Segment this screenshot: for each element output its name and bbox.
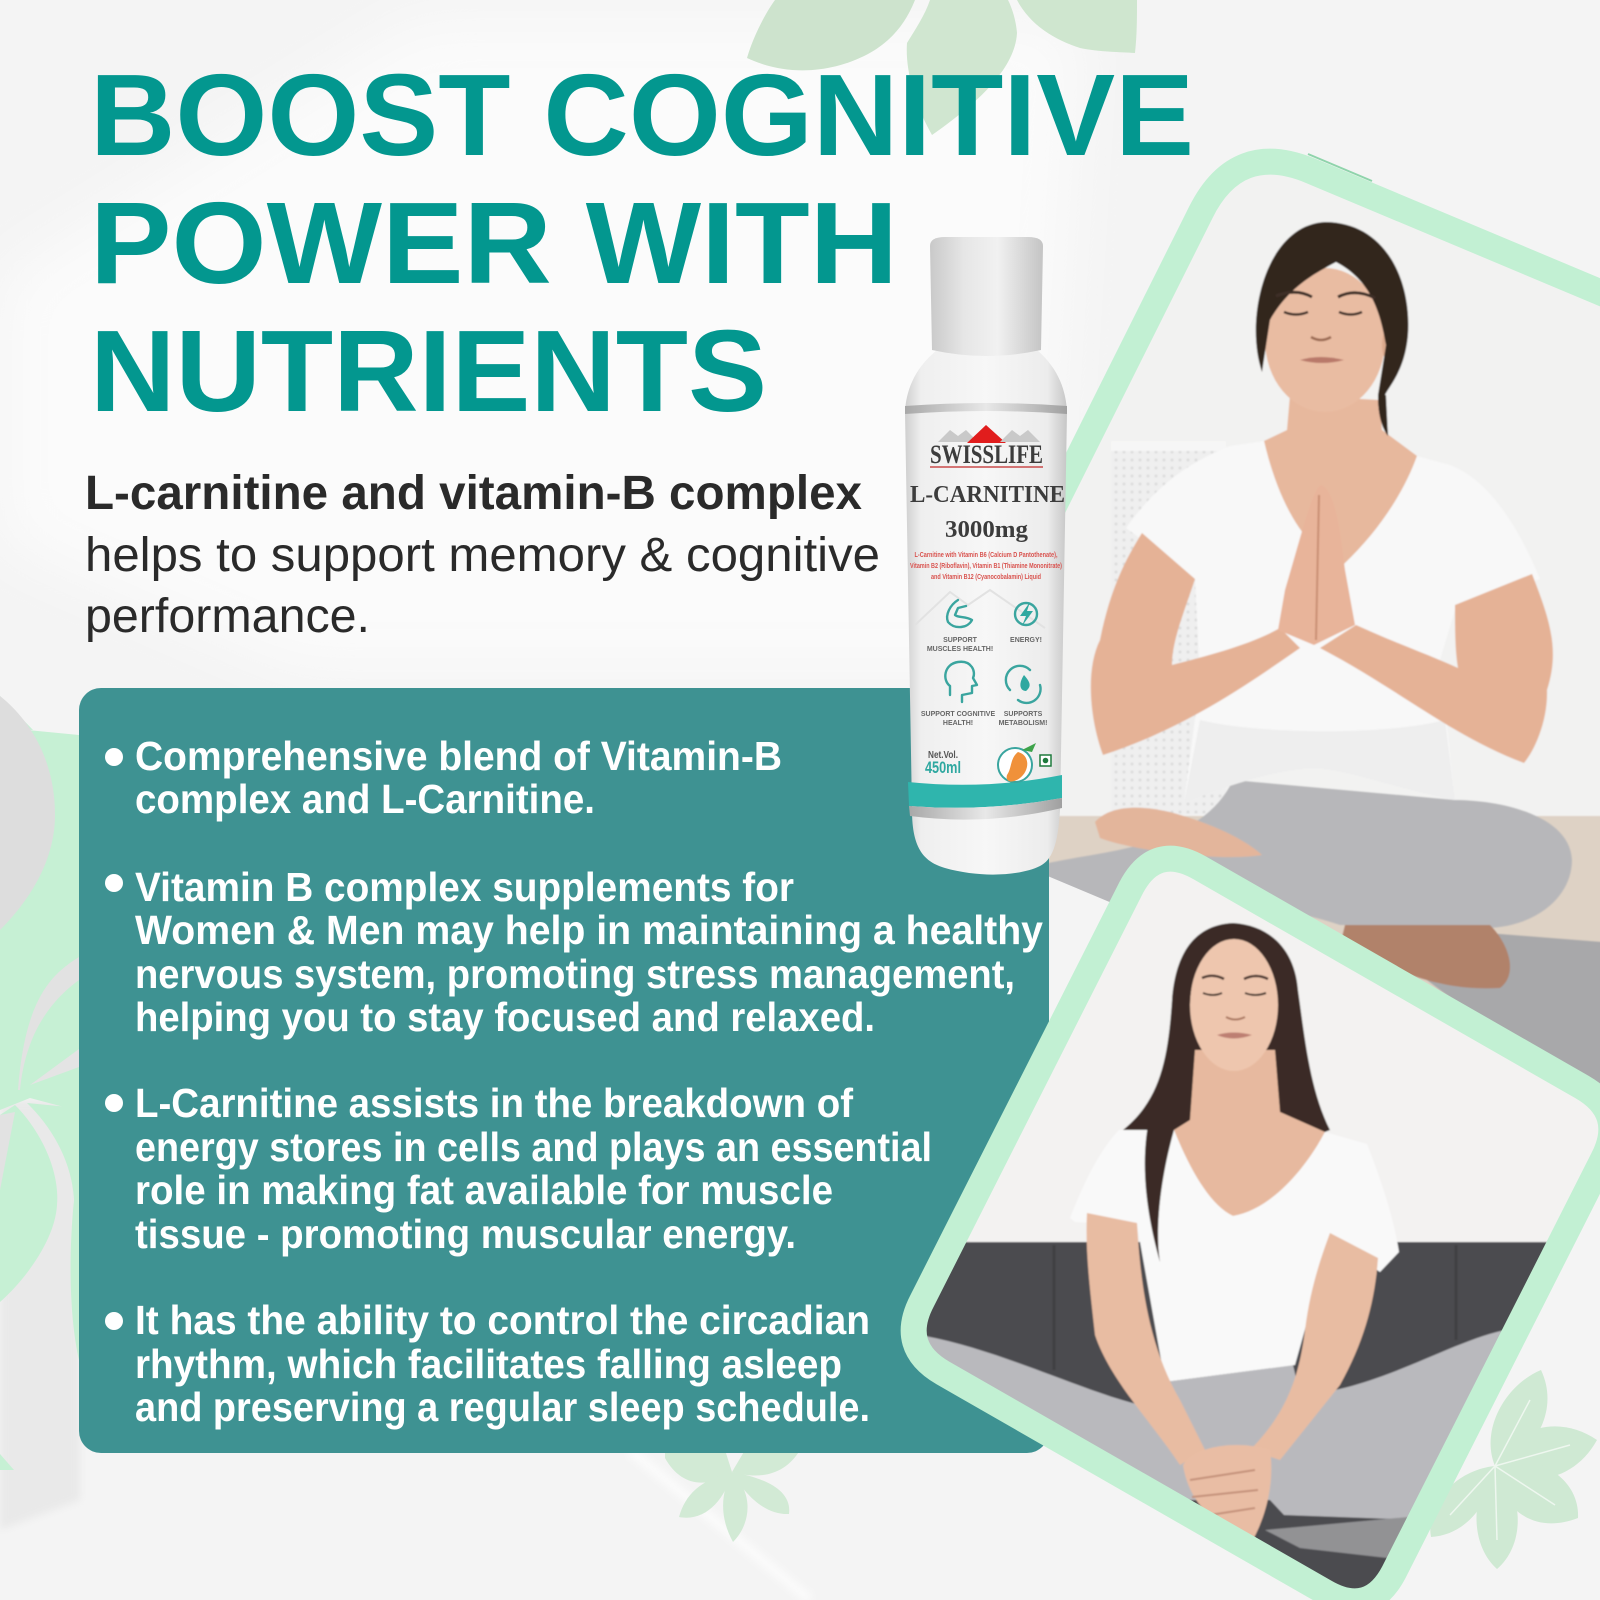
bottle description: Vitamin B2 (Riboflavin), Vitamin B1 (Thiamine Mononitrate) <box>910 561 1062 570</box>
bottle icons: SUPPORT COGNITIVE <box>921 711 995 718</box>
bullet 1 <box>105 733 782 822</box>
bottle logo <box>930 425 1043 469</box>
bullet 2: nervous system, promoting stress management, <box>135 951 1015 997</box>
bullet 2 <box>105 864 1043 1040</box>
bottle icons: SUPPORTS <box>1004 711 1043 718</box>
icon: muscle <box>947 600 972 627</box>
bullet 3: energy stores in cells and plays an essential <box>135 1124 932 1170</box>
title <box>90 50 1194 436</box>
decorative flower: bottom right <box>1430 1370 1597 1569</box>
subheading: helps to support memory & cognitive <box>85 529 880 582</box>
bullet 2: Women & Men may help in maintaining a healthy <box>135 907 1043 953</box>
bottle description: L-Carnitine with Vitamin B6 (Calcium D Pantothenate), <box>914 550 1058 559</box>
decorative leaves: top <box>747 0 1137 135</box>
bottle description: and Vitamin B12 (Cyanocobalamin) Liquid <box>931 572 1041 581</box>
bottle product name: L-CARNITINE <box>910 482 1065 508</box>
bottle icons: METABOLISM! <box>999 720 1047 727</box>
subheading: performance. <box>85 590 370 643</box>
bullet 1: complex and L-Carnitine. <box>135 776 595 822</box>
bullet 4: rhythm, which facilitates falling asleep <box>135 1341 842 1387</box>
bottle product name: 3000mg <box>945 517 1028 543</box>
subheading: L-carnitine and vitamin-B complex <box>85 467 862 520</box>
icon: head <box>945 662 977 702</box>
bullet 3: role in making fat available for muscle <box>135 1167 833 1213</box>
bullet 4 <box>105 1297 870 1430</box>
panel: benefits list <box>79 688 1049 1453</box>
bottle volume and flavour: 450ml <box>925 758 961 777</box>
bullet 4: It has the ability to control the circadian <box>135 1297 870 1343</box>
bottle volume and flavour: Net.Vol. <box>928 750 958 761</box>
bottle icons <box>915 590 1047 727</box>
bottle icons: ENERGY! <box>1010 637 1042 644</box>
bottle icons: MUSCLES HEALTH! <box>927 646 993 653</box>
bullet 3: tissue - promoting muscular energy. <box>135 1211 796 1257</box>
frame: bottom photo mint border <box>914 859 1600 1600</box>
bullet 1: Comprehensive blend of Vitamin-B <box>135 733 782 779</box>
icon: metabolism <box>1006 666 1041 703</box>
title: BOOST COGNITIVE <box>90 50 1194 180</box>
title: POWER WITH <box>90 178 898 308</box>
bottle icons: SUPPORT <box>943 637 978 644</box>
bottle logo: SWISSLIFE <box>930 440 1043 469</box>
product bottle <box>905 237 1067 875</box>
photo: woman seated on sofa with eyes closed <box>880 830 1600 1600</box>
bullet 2: helping you to stay focused and relaxed. <box>135 994 875 1040</box>
bullet 3 <box>105 1080 932 1257</box>
bottle shape <box>905 237 1067 875</box>
frame: top photo mint border <box>900 162 1600 814</box>
bottle description <box>910 550 1062 581</box>
bullet 4: and preserving a regular sleep schedule. <box>135 1384 870 1430</box>
decorative flower: bottom centre <box>665 1450 800 1542</box>
title: NUTRIENTS <box>90 306 767 436</box>
bullet 2: Vitamin B complex supplements for <box>135 864 794 910</box>
bottle volume and flavour <box>925 743 1051 782</box>
subheading <box>85 467 880 643</box>
bottle icons: HEALTH! <box>943 720 973 727</box>
bullet 3: L-Carnitine assists in the breakdown of <box>135 1080 853 1126</box>
bottle product name <box>910 482 1065 543</box>
photo: woman meditating with hands in prayer <box>1049 148 1600 1084</box>
icon: energy <box>1015 602 1037 626</box>
decorative leaves: left <box>0 696 79 1470</box>
